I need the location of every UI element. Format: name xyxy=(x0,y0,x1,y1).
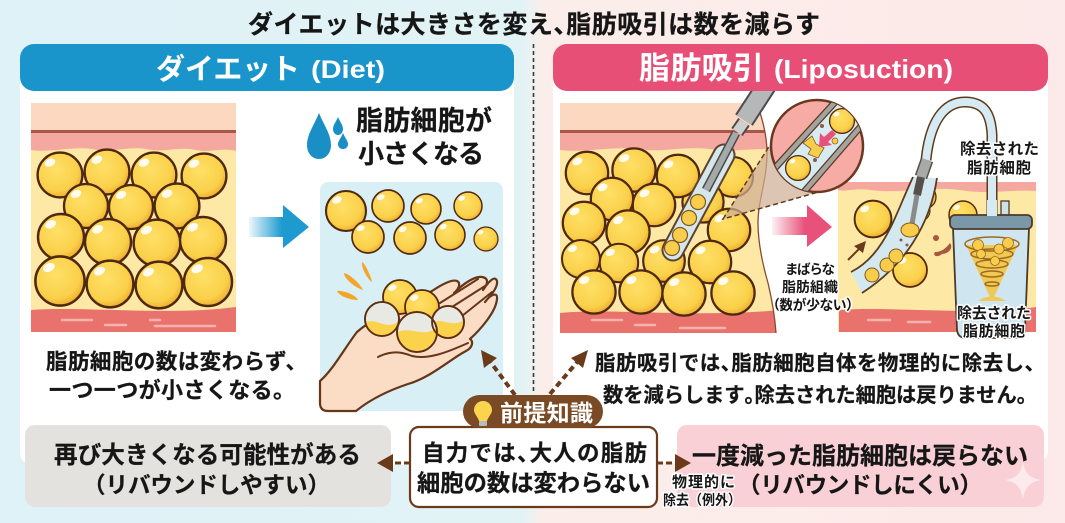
callout: rebound unlikely xyxy=(677,425,1044,507)
icon: sparkle strokes xyxy=(337,262,372,300)
heading: diet: ダイエット xyxy=(156,52,300,86)
label: physical removal exception xyxy=(663,473,741,508)
zoom cone xyxy=(723,145,815,219)
heading: cells shrink: 小さくなる xyxy=(358,139,484,169)
collection cup xyxy=(950,200,1032,338)
label: removed cells top: 脂肪細胞 xyxy=(967,159,1031,177)
heading: diet: (Diet) xyxy=(311,56,385,84)
text: diet explanation xyxy=(46,350,307,403)
heading: liposuction: (Liposuction) xyxy=(774,54,953,84)
panel background: liposuction xyxy=(553,70,1048,463)
text: liposuction explanation: 数を減らします。除去された細胞は戻りません。 xyxy=(603,383,1037,407)
callout: rebound likely: 再び大きくなる可能性がある xyxy=(54,441,361,469)
label: removed cells top xyxy=(960,140,1039,177)
divider xyxy=(532,44,534,392)
fat cells before xyxy=(35,150,232,308)
label: sparse tissue xyxy=(766,262,860,313)
label: physical removal exception: 除去（例外） xyxy=(663,492,741,508)
heading: diet xyxy=(20,44,514,91)
title: ダイエットは大きさを変え、脂肪吸引は数を減らす xyxy=(248,10,820,39)
skin block after xyxy=(838,182,1036,332)
label: removed cells bottom: 除去された xyxy=(957,305,1031,322)
callout: rebound unlikely: 一度減った脂肪細胞は戻らない xyxy=(692,443,1028,470)
cannula xyxy=(664,80,770,256)
skin cross-section before xyxy=(31,103,236,332)
icon: hand with cells xyxy=(320,277,497,411)
fat cells after xyxy=(855,185,977,287)
suction tube xyxy=(851,102,992,293)
text: liposuction explanation: 脂肪吸引では、脂肪細胞自体を物理的に除去し、 xyxy=(595,352,1045,375)
skin block during xyxy=(560,103,780,333)
small fat cells xyxy=(326,190,498,254)
panel background: diet xyxy=(20,70,514,465)
label: sparse tissue: まばらな xyxy=(785,262,835,277)
text: diet explanation: 脂肪細胞の数は変わらず、 xyxy=(46,350,307,374)
arrow: liposuction xyxy=(772,205,832,247)
magnified view xyxy=(770,98,864,194)
heading: liposuction xyxy=(553,44,1048,91)
arrow: diet xyxy=(249,205,309,248)
heading: cells shrink: 脂肪細胞が xyxy=(356,105,492,136)
callout: premise: 細胞の数は変わらない xyxy=(417,470,650,496)
label: removed cells top: 除去された xyxy=(960,140,1039,158)
icon: water drops xyxy=(307,113,348,159)
label: removed cells bottom: 脂肪細胞 xyxy=(963,322,1025,340)
callout: rebound unlikely: （リバウンドしにくい） xyxy=(738,473,982,498)
result panel xyxy=(320,182,503,411)
badge: prior knowledge: 前提知識 xyxy=(500,400,593,426)
label: sparse tissue: （数が少ない） xyxy=(766,297,860,313)
icon: sparkle xyxy=(1005,462,1041,499)
text: liposuction explanation xyxy=(595,352,1045,407)
arrow: sparse tissue xyxy=(848,241,866,260)
label: removed cells bottom xyxy=(957,305,1031,340)
heading: liposuction: 脂肪吸引 xyxy=(639,51,764,86)
arrow: to liposuction text xyxy=(550,350,588,394)
panel: diet xyxy=(20,44,514,465)
icon: light bulb xyxy=(474,401,492,426)
label: sparse tissue: 脂肪組織 xyxy=(782,279,838,295)
fat cells during xyxy=(562,148,755,316)
label: physical removal exception: 物理的に xyxy=(672,473,735,491)
text: diet explanation: 一つ一つが小さくなる。 xyxy=(49,378,295,403)
callout: premise xyxy=(410,427,657,507)
fat spiral xyxy=(965,237,1019,301)
arrow: to rebound unlikely xyxy=(657,454,691,472)
callout: premise: 自力では、大人の脂肪 xyxy=(422,441,647,466)
panel: liposuction xyxy=(553,44,1048,463)
arrow: to rebound likely xyxy=(377,454,410,472)
callout: rebound likely xyxy=(25,425,391,507)
callout: rebound likely: （リバウンドしやすい） xyxy=(83,473,330,498)
arrow: to diet result xyxy=(481,350,515,395)
heading: cells shrink xyxy=(356,105,492,169)
badge: prior knowledge xyxy=(463,395,603,428)
